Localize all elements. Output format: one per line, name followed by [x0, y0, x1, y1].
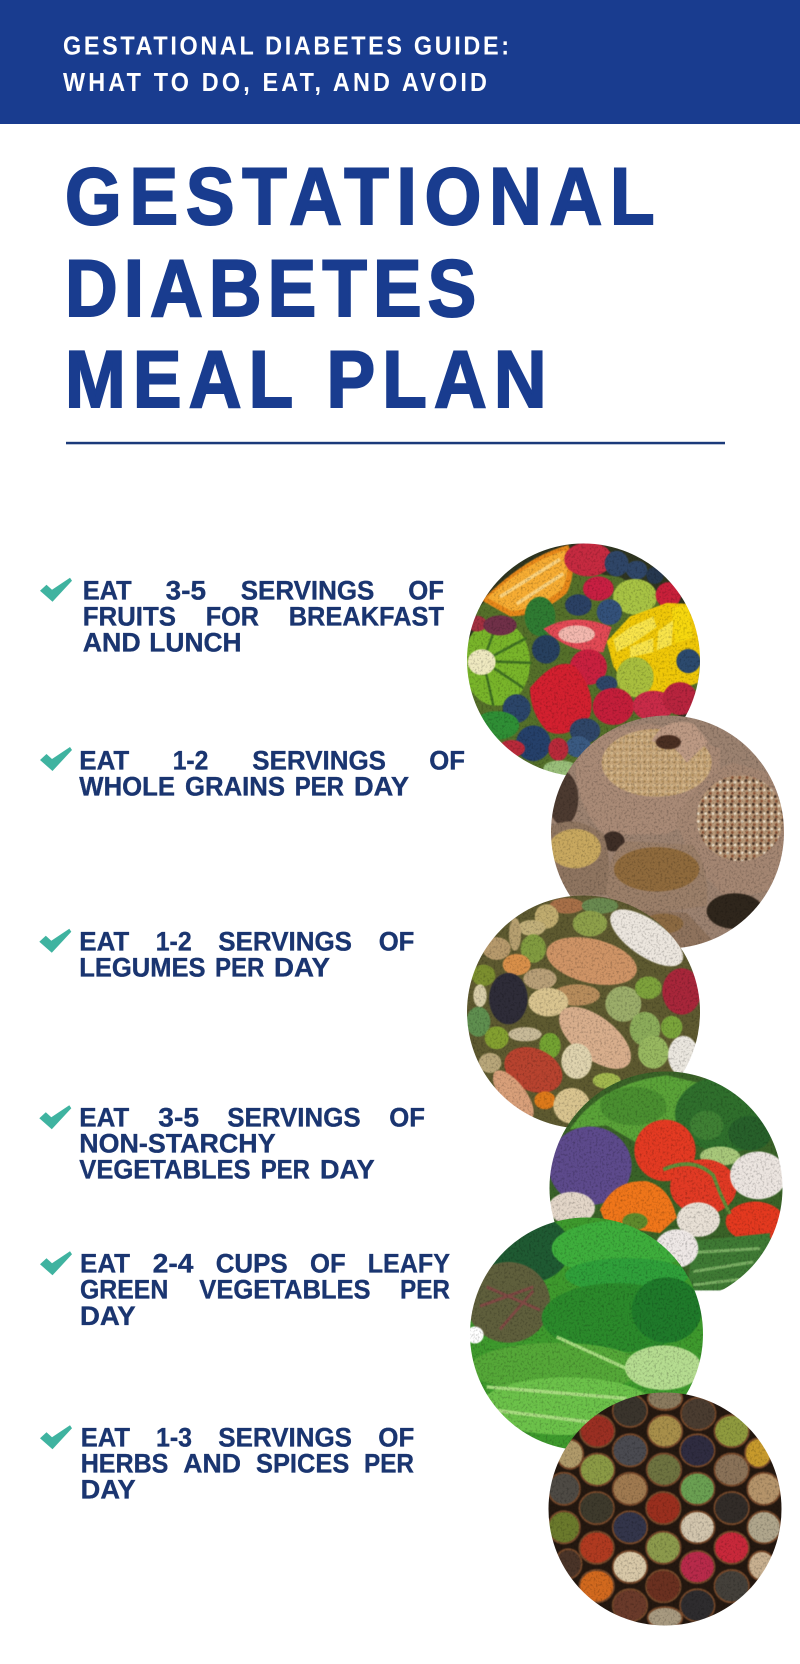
list item: fruits: AND: [83, 627, 141, 657]
food photo: fruits: [463, 541, 703, 781]
list item: non-starchy vegetables: [39, 1103, 425, 1185]
title: DIABETES: [65, 243, 476, 334]
list item: leafy green vegetables: CUPS: [216, 1249, 288, 1279]
header banner: [0, 0, 800, 124]
list item: legumes: LEGUMES: [79, 953, 206, 983]
food photo: leafy green vegetables: [466, 1214, 707, 1452]
list item: herbs and spices: DAY: [81, 1475, 136, 1505]
list item: fruits: EAT: [83, 575, 132, 605]
food photo: whole grains: [547, 713, 790, 952]
list item: legumes: SERVINGS: [218, 927, 352, 957]
list item: non-starchy vegetables: EAT: [79, 1103, 130, 1133]
list item: fruits: 3-5: [166, 575, 206, 605]
list item: non-starchy vegetables: VEGETABLES: [79, 1155, 251, 1185]
list item: legumes: DAY: [274, 953, 330, 983]
list item: herbs and spices: SERVINGS: [218, 1423, 352, 1453]
list item: non-starchy vegetables: OF: [389, 1103, 425, 1133]
list item: fruits: FOR: [206, 601, 259, 631]
list item: fruits: SERVINGS: [241, 575, 374, 605]
title: [65, 151, 654, 425]
icon: check mark: [40, 578, 72, 602]
list item: leafy green vegetables: 2-4: [153, 1249, 193, 1279]
list item: herbs and spices: AND: [183, 1449, 241, 1479]
icon: check mark: [40, 747, 72, 771]
list item: leafy green vegetables: LEAFY: [368, 1249, 450, 1279]
list item: non-starchy vegetables: 3-5: [158, 1103, 199, 1133]
food photo: non-starchy vegetables: [547, 1068, 787, 1291]
list item: leafy green vegetables: GREEN: [80, 1275, 168, 1305]
list item: non-starchy vegetables: SERVINGS: [227, 1103, 361, 1133]
list item: whole grains: WHOLE: [79, 771, 175, 801]
food photo: herbs and spices: [543, 1387, 787, 1629]
list item: fruits: [40, 575, 444, 657]
list item: herbs and spices: SPICES: [256, 1449, 349, 1479]
title: MEAL PLAN: [65, 334, 547, 425]
header text: [63, 32, 509, 97]
list item: legumes: [39, 927, 414, 983]
list item: herbs and spices: [40, 1423, 414, 1505]
list item: leafy green vegetables: [40, 1249, 450, 1331]
list item: whole grains: PER: [295, 771, 344, 801]
list item: leafy green vegetables: DAY: [80, 1301, 136, 1331]
list item: fruits: FRUITS: [83, 601, 176, 631]
icon: check mark: [40, 1425, 72, 1449]
list item: non-starchy vegetables: DAY: [320, 1155, 375, 1185]
list item: legumes: 1-2: [156, 927, 192, 957]
list item: fruits: OF: [408, 575, 444, 605]
list item: leafy green vegetables: VEGETABLES: [199, 1275, 371, 1305]
header text: WHAT TO DO, EAT, AND AVOID: [63, 69, 487, 97]
list item: whole grains: DAY: [354, 771, 409, 801]
list item: fruits: LUNCH: [149, 627, 242, 657]
list item: leafy green vegetables: OF: [310, 1249, 346, 1279]
list item: non-starchy vegetables: NON-STARCHY: [79, 1129, 276, 1159]
list item: whole grains: GRAINS: [185, 771, 285, 801]
icon: check mark: [39, 1105, 71, 1129]
list item: fruits: BREAKFAST: [289, 601, 444, 631]
list item: herbs and spices: PER: [364, 1449, 414, 1479]
icon: check mark: [40, 1251, 72, 1275]
list item: leafy green vegetables: EAT: [80, 1249, 130, 1279]
icon: check mark: [39, 929, 71, 953]
list item: non-starchy vegetables: PER: [261, 1155, 310, 1185]
list item: whole grains: EAT: [79, 745, 130, 775]
list item: herbs and spices: 1-3: [156, 1423, 192, 1453]
list item: whole grains: [40, 745, 465, 801]
list item: legumes: OF: [379, 927, 414, 957]
list item: herbs and spices: OF: [378, 1423, 414, 1453]
list item: whole grains: SERVINGS: [252, 745, 386, 775]
list item: herbs and spices: HERBS: [81, 1449, 168, 1479]
list item: herbs and spices: EAT: [81, 1423, 130, 1453]
list item: whole grains: 1-2: [173, 745, 208, 775]
list item: legumes: PER: [215, 953, 264, 983]
list item: whole grains: OF: [429, 745, 465, 775]
list item: leafy green vegetables: PER: [400, 1275, 450, 1305]
header text: GESTATIONAL DIABETES GUIDE:: [63, 32, 509, 61]
title: GESTATIONAL: [65, 151, 655, 242]
food photo: legumes: [463, 891, 707, 1134]
list item: legumes: EAT: [79, 927, 130, 957]
